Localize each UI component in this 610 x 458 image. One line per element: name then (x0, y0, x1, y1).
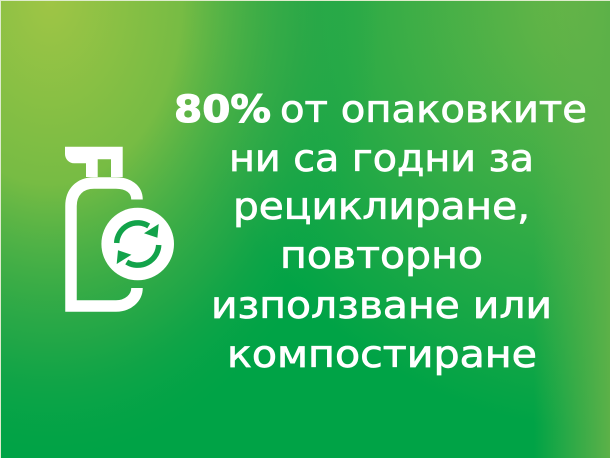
icon: recycling badge (101, 208, 174, 280)
text line 2: ни са годни за (229, 136, 534, 180)
text line 5: използване или (211, 283, 552, 327)
text line 1: от опаковките (280, 87, 587, 131)
icon: bottle pump head (65, 147, 123, 177)
icon: bottle body (71, 183, 137, 306)
text line 4: повторно (280, 233, 483, 277)
icon: pump bottle with recycling symbol (65, 147, 174, 306)
text block: headline (174, 87, 587, 376)
text line 3: рециклиране, (233, 184, 530, 228)
stat: 80%: 80% (174, 87, 271, 131)
text line 6: компостиране (227, 332, 537, 376)
